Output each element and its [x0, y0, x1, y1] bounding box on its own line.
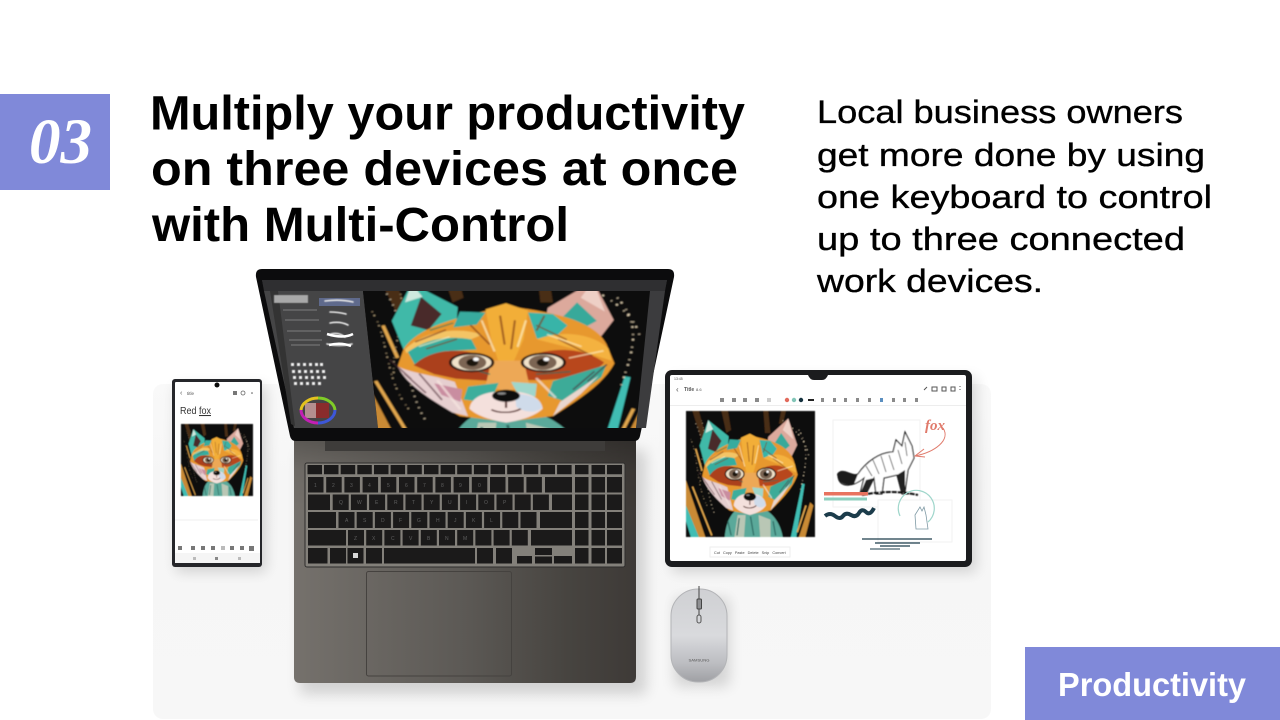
laptop — [256, 269, 674, 683]
sketch: fox — [837, 432, 918, 495]
tablet — [665, 370, 972, 567]
laptop base — [294, 438, 636, 683]
right tool strip — [636, 291, 665, 428]
panel: device backdrop — [153, 384, 991, 719]
screen artwork: fox — [363, 291, 650, 428]
trackpad — [366, 572, 512, 676]
tablet notch — [808, 375, 828, 380]
category label: Productivity — [1058, 666, 1247, 703]
sketch: red fox note and arrow: fox — [925, 418, 945, 434]
windows key — [353, 553, 358, 558]
phone note title: Red fox — [180, 405, 212, 417]
phone toolbar — [175, 520, 260, 563]
description text — [816, 94, 1212, 299]
key legends: 1234567890 — [314, 483, 481, 489]
laptop lid — [256, 269, 674, 455]
mouse: SAMSUNG — [688, 658, 710, 662]
key legends: ASDFGHJKL — [345, 518, 493, 524]
description text: work devices. — [816, 263, 1043, 299]
tablet sketch cards — [833, 420, 952, 542]
key legends — [314, 483, 507, 542]
device shadows — [176, 378, 976, 694]
category label — [1025, 647, 1280, 720]
mouse — [671, 586, 727, 682]
phone — [172, 379, 262, 567]
tablet context menu: Cut Copy Paste Delete Snip Convert — [714, 551, 787, 555]
phone header: title — [187, 391, 194, 396]
tablet header: 8.6 — [696, 387, 702, 392]
title: with Multi-Control — [151, 199, 569, 252]
phone camera — [214, 382, 220, 388]
tablet context menu — [710, 547, 790, 557]
key legends: ZXCVBNM — [354, 536, 467, 542]
phone fox image — [181, 424, 253, 496]
phone header — [180, 390, 253, 397]
swatch grid — [291, 363, 326, 385]
number badge — [0, 94, 110, 190]
tablet header: Title — [684, 387, 694, 393]
title — [150, 88, 745, 252]
key legends: QWERTYUIOP — [339, 500, 507, 506]
tablet fox image — [686, 411, 815, 537]
screen: menu bar — [262, 280, 667, 291]
tablet header — [674, 377, 960, 394]
sketch: colour bars and brush strokes — [824, 490, 934, 549]
screen: tool panels — [264, 291, 378, 428]
keyboard — [305, 463, 625, 567]
number badge: 03 — [29, 106, 92, 178]
description text: up to three connected — [817, 221, 1185, 257]
description text: get more done by using — [817, 137, 1205, 173]
tablet header: ‹ — [676, 385, 679, 394]
title: Multiply your productivity — [150, 88, 745, 140]
icon: colour wheel — [301, 398, 335, 423]
phone header: ‹ — [180, 390, 183, 397]
sketch: red fox note and arrow — [915, 418, 945, 457]
tablet toolbar — [670, 398, 966, 406]
title: on three devices at once — [151, 143, 738, 196]
description text: one keyboard to control — [817, 179, 1212, 215]
tablet header: 13:45 — [674, 377, 683, 381]
description text: Local business owners — [817, 94, 1183, 130]
